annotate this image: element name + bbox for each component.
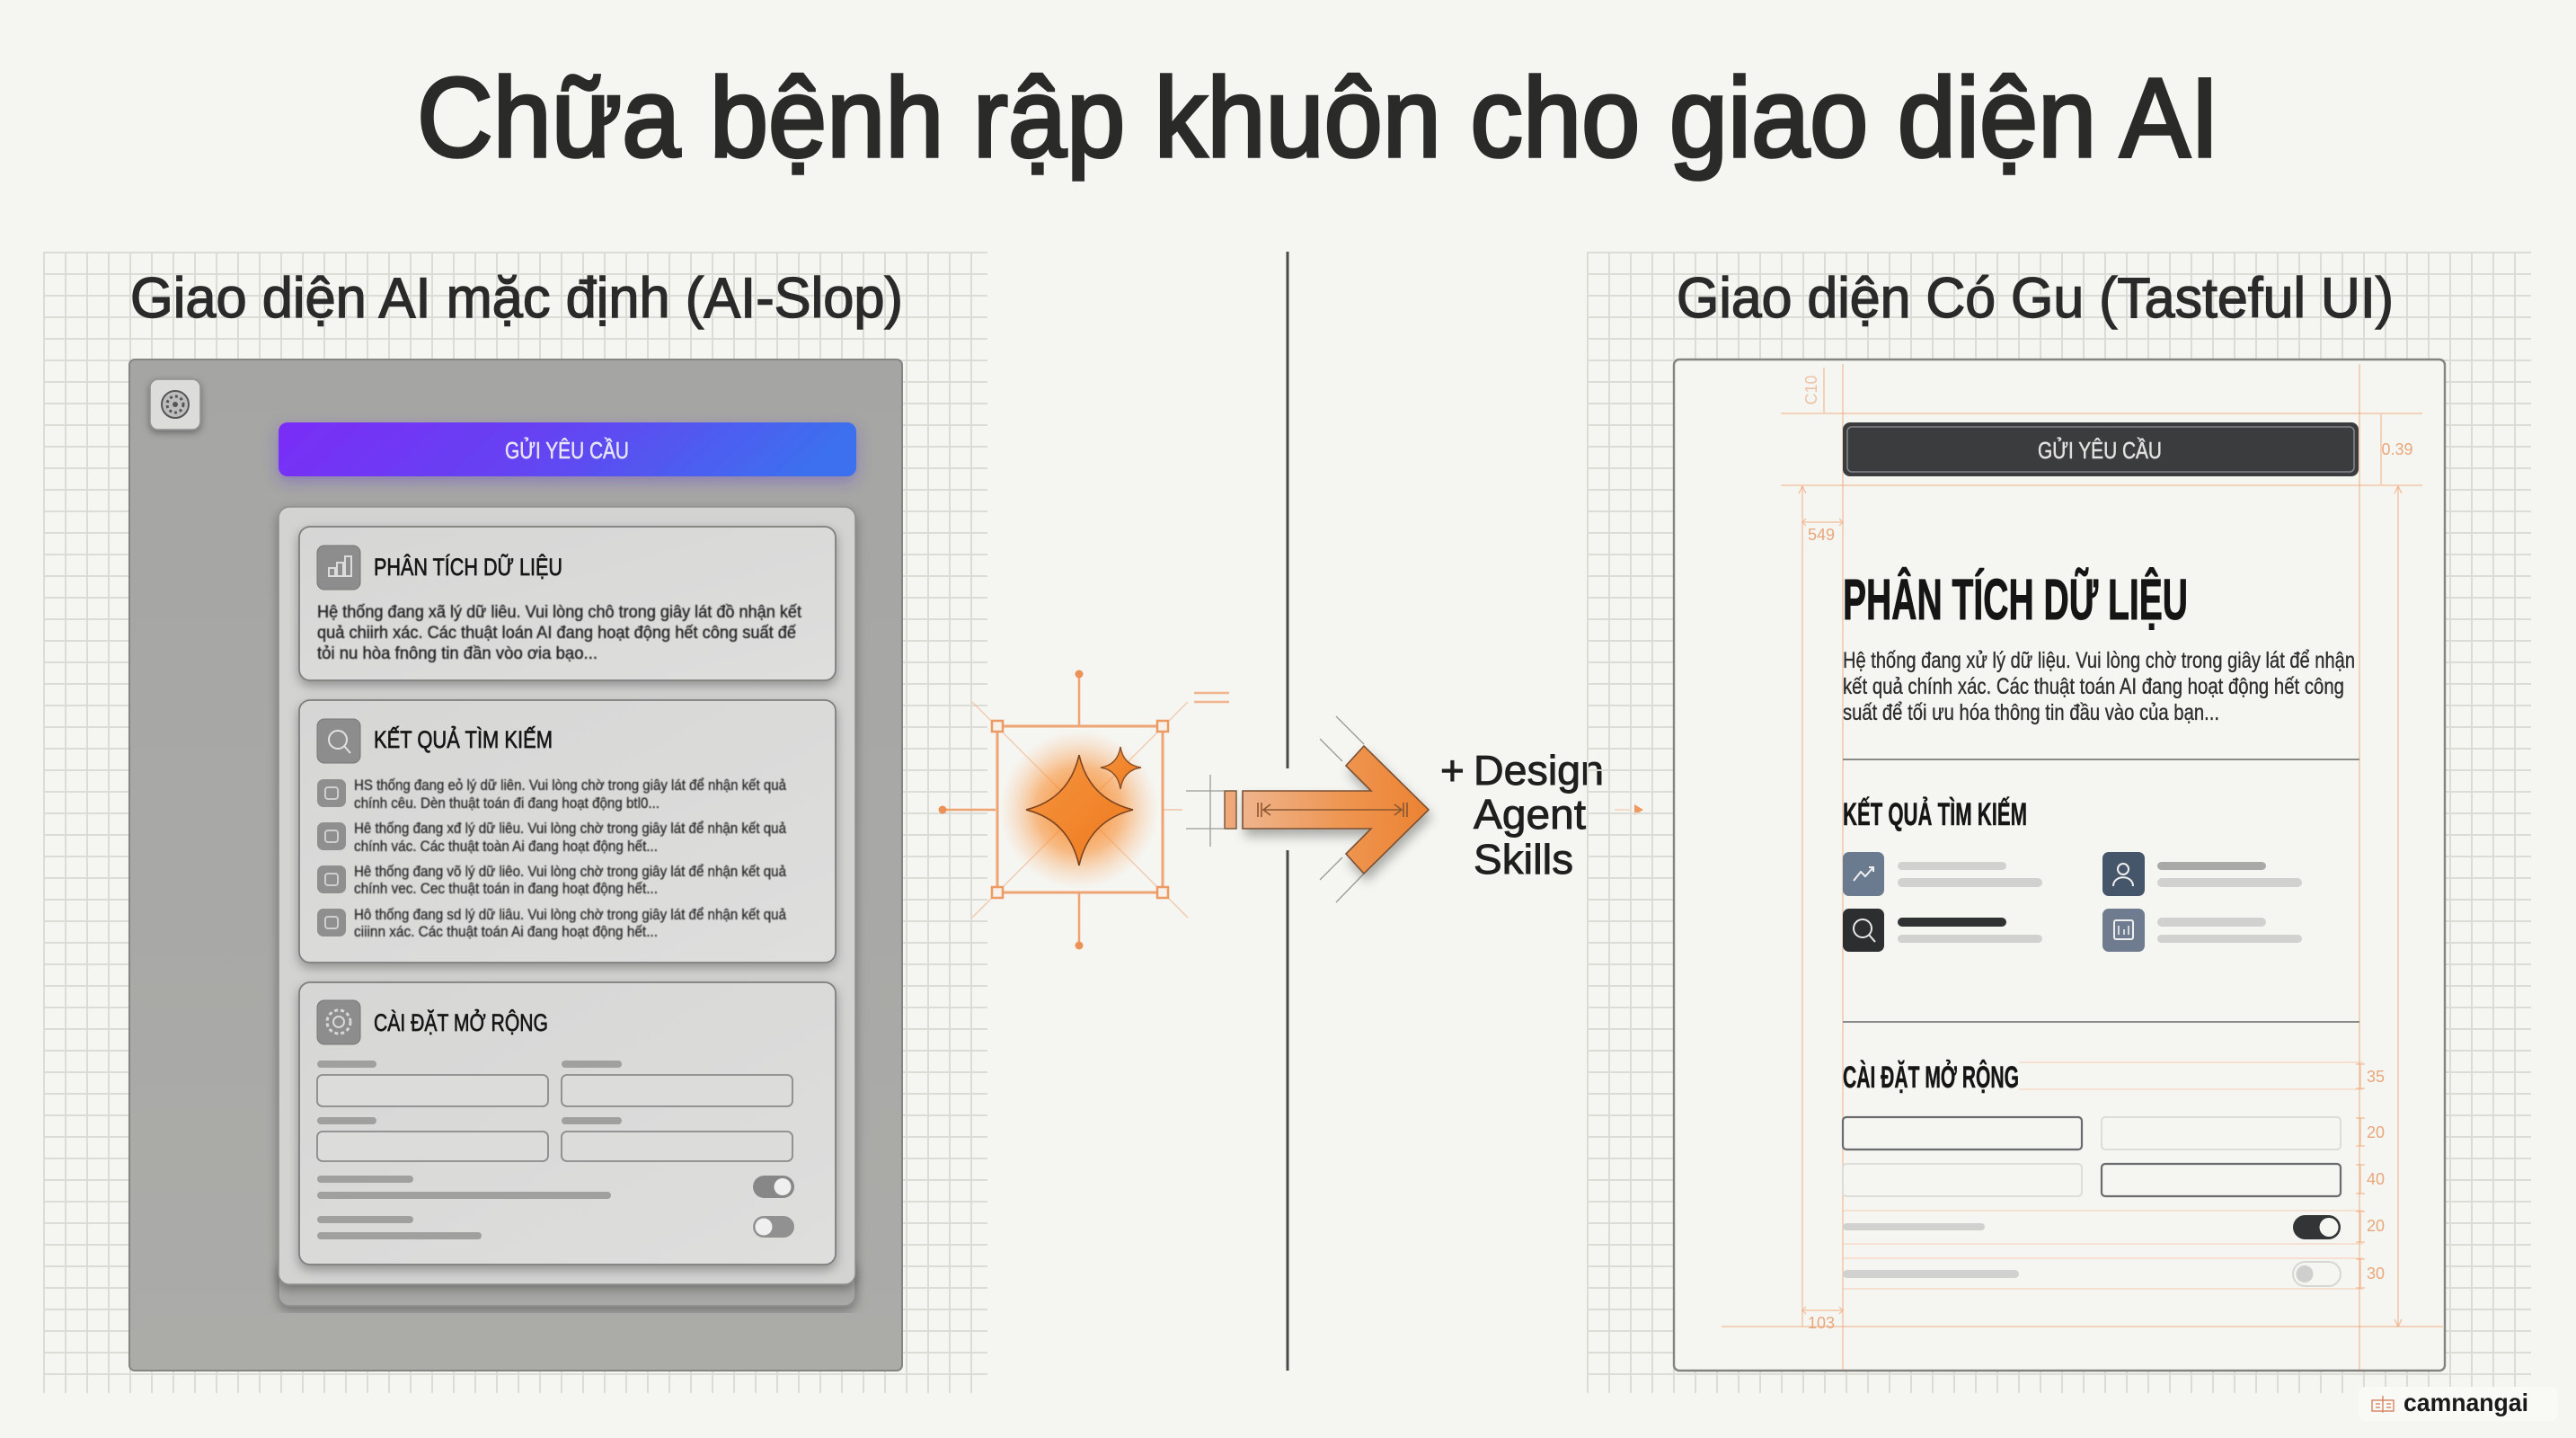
result list icons <box>317 779 346 936</box>
dimension labels: 103 <box>1808 1314 1835 1332</box>
title: Chữa bệnh rập khuôn cho giao diện AI <box>417 56 2219 181</box>
grid background left <box>43 252 987 1393</box>
blueprint guides <box>943 674 1229 945</box>
purple gradient button: GỬI YÊU CẦU <box>505 436 629 464</box>
section body text: suất để tối ưu hóa thông tin đầu vào của bạn... <box>1843 700 2219 725</box>
form field labels <box>317 1061 622 1124</box>
dimension labels: 20 <box>2367 1217 2385 1235</box>
card body text <box>317 603 802 663</box>
center divider line <box>1287 252 1288 1371</box>
result: image icon <box>2102 909 2302 952</box>
result list text <box>354 777 787 940</box>
result list text: Hê thống đang võ lý dữ liêo. Vui lòng chờ trong giây lát để nhận kết quả <box>354 864 787 880</box>
arrow body <box>1243 746 1429 874</box>
icon: magnifier tile <box>317 719 360 763</box>
small sparkle <box>1101 747 1141 789</box>
frame corner handles <box>992 721 1168 898</box>
blueprint guide lines <box>1722 364 2443 1370</box>
dark button: GỬI YÊU CẦU <box>2038 436 2162 464</box>
section heading: data analysis: PHÂN TÍCH DỮ LIỆU <box>1843 566 2188 632</box>
gray mock screen <box>129 360 902 1371</box>
result list text: chính vec. Cec thuật toán in đang hoạt động hết... <box>354 881 658 897</box>
icon: small guide arrow <box>1615 804 1643 815</box>
section heading: settings: CÀI ĐẶT MỞ RỘNG <box>1843 1060 2019 1095</box>
card body text: Hệ thống đang xã lý dữ liêu. Vui lòng chô trong giây lát đồ nhận kết <box>317 603 802 622</box>
setting row: off <box>1843 1262 2341 1286</box>
dimension labels: 20 <box>2367 1123 2385 1141</box>
form inputs <box>1843 1117 2341 1196</box>
label: design agent skills: Skills <box>1474 836 1573 883</box>
result list text: ciiinn xác. Các thuật toán Ai đang hoạt động hết... <box>354 924 658 940</box>
card body text: quả chiirh xác. Các thuật loán AI đang hoạt động hết công suất đế <box>317 624 796 643</box>
arrow measure lines <box>1186 716 1364 902</box>
arrow inner dimension <box>1258 803 1407 817</box>
dimension labels: 0.39 <box>2381 440 2413 458</box>
label: design agent skills: Agent <box>1474 791 1586 838</box>
setting row: on <box>1843 1215 2341 1239</box>
section body text: Hệ thống đang xử lý dữ liệu. Vui lòng chờ trong giây lát để nhận <box>1843 648 2355 673</box>
result grid <box>1843 852 2302 952</box>
result list text: Hê thống đang xđ lý dữ liêu. Vui lòng chờ trong giây lát để nhận kết quả <box>354 821 787 837</box>
label: design agent skills <box>1440 747 1604 883</box>
card: data analysis <box>299 527 836 680</box>
dimension labels <box>1802 375 2413 1332</box>
panel: tasteful interface <box>1587 252 2531 1393</box>
result list text: chính vác. Các thuật toàn Ai đang hoạt động hết... <box>354 839 658 855</box>
card body text: tỏi nu hòa fnông tin đần vòo ơia bạo... <box>317 644 598 663</box>
sparkle glow <box>1000 731 1158 889</box>
section body text: kết quả chính xác. Các thuật toán AI đang hoạt động hết công <box>1843 674 2344 699</box>
icon: book <box>2372 1396 2394 1412</box>
result list text: Hô thống đang sd lý dữ liâu. Vui lòng chờ trong giây lát để nhận kết quả <box>354 907 787 923</box>
guide end dots <box>938 670 1084 949</box>
watermark <box>2359 1387 2558 1421</box>
dark button <box>1843 422 2359 476</box>
heading right: Giao diện Có Gu (Tasteful UI) <box>1677 267 2394 330</box>
icon: bar chart tile <box>317 546 360 590</box>
stacked card layers <box>279 507 855 1306</box>
icon: gear tile <box>317 1000 360 1044</box>
purple gradient button <box>279 422 856 476</box>
dimension labels: C10 <box>1802 375 1820 405</box>
result: trend icon <box>1843 852 2042 896</box>
arrow: transformation arrow <box>1186 716 1429 902</box>
card heading: CÀI ĐẶT MỞ RỘNG <box>374 1007 548 1036</box>
dimension labels: 549 <box>1808 526 1835 544</box>
watermark text: camnangai <box>2403 1389 2528 1416</box>
card heading: KẾT QUẢ TÌM KIẾM <box>374 724 553 753</box>
divider <box>1843 759 2359 1022</box>
result: active search icon <box>1843 909 2042 952</box>
arrow tail segment <box>1225 791 1236 829</box>
dimension labels: 40 <box>2367 1170 2385 1188</box>
light mock screen <box>1674 360 2445 1371</box>
icon: sparkle inside blueprint frame <box>938 670 1229 949</box>
result list text: chính cêu. Dèn thuật toán đi đang hoạt động btl0... <box>354 795 659 812</box>
panel: default AI-slop interface <box>43 252 987 1393</box>
form inputs <box>317 1075 792 1161</box>
result list text: HS thống đang eỏ lý dữ liên. Vui lòng chờ trong giây lát để nhận kết quả <box>354 777 787 794</box>
label: design agent skills: + <box>1440 747 1465 794</box>
big sparkle <box>1026 755 1133 865</box>
label: design agent skills: Design <box>1474 747 1604 794</box>
setting description bars <box>317 1176 611 1239</box>
heading left: Giao diện AI mặc định (AI-Slop) <box>130 267 903 330</box>
section body text <box>1843 648 2355 725</box>
grid background right <box>1587 252 2531 1393</box>
section heading: search results: KẾT QUẢ TÌM KIẾM <box>1843 796 2027 832</box>
icon: floating logo tile <box>150 379 200 430</box>
dimension labels: 35 <box>2367 1068 2385 1086</box>
toggle switches <box>753 1176 794 1238</box>
card heading: PHÂN TÍCH DỮ LIỆU <box>374 553 562 581</box>
result: person icon <box>2102 852 2302 896</box>
card: search results <box>299 700 836 963</box>
card: extended settings <box>299 982 836 1265</box>
dimension labels: 30 <box>2367 1265 2385 1283</box>
